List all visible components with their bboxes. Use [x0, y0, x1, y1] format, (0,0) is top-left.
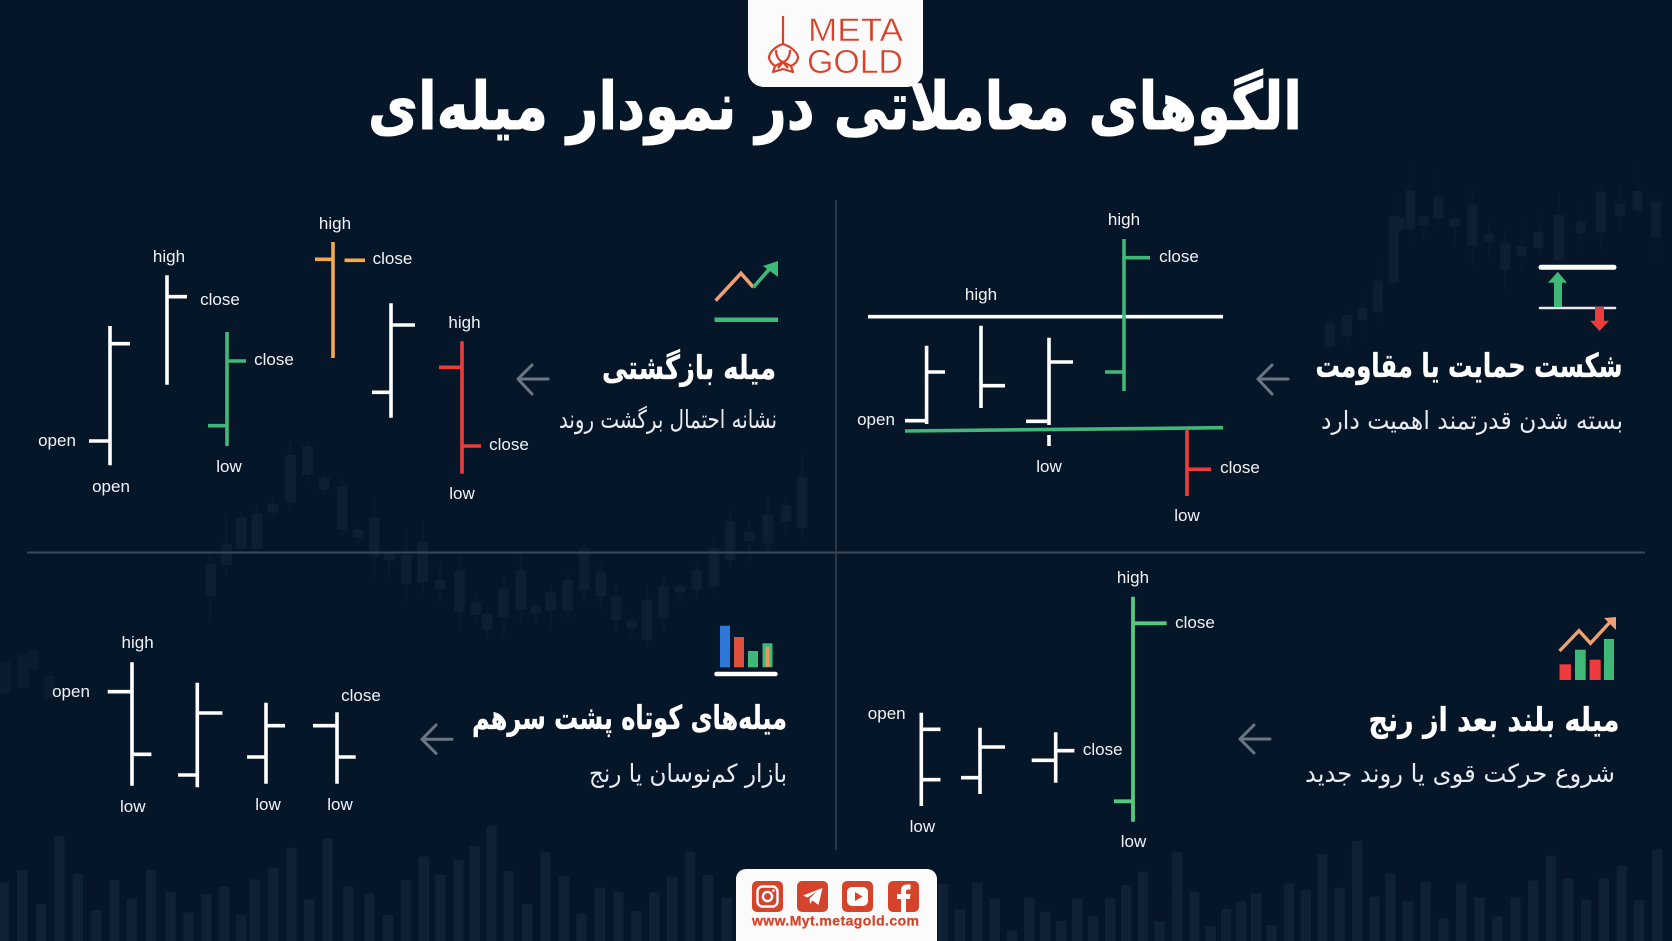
chart: bars: [52, 633, 381, 816]
heading: میله بازگشتی: [602, 348, 776, 387]
chart: bars: close: [254, 350, 294, 369]
logo card: [748, 0, 923, 87]
chart: bars: high: [965, 285, 997, 304]
heading: میله‌های کوتاه پشت سرهم: [472, 698, 787, 738]
icon: trend reversal: [714, 261, 778, 320]
icon: telegram: [797, 881, 828, 912]
chart: bars: close: [489, 435, 529, 454]
chart: bars: high: [448, 313, 481, 332]
chart: bars: close: [1159, 247, 1199, 266]
chart: bars: low: [449, 484, 475, 503]
chart: bars: [868, 568, 1215, 851]
chart: bars: close: [1083, 740, 1123, 759]
chart: bars: [857, 210, 1260, 525]
chart: bars: low: [120, 797, 146, 816]
chart: bars: high: [153, 247, 185, 266]
panel: short consecutive candles: [52, 626, 787, 816]
chart: bars: low: [255, 795, 281, 814]
icon: youtube: [842, 881, 873, 912]
arrow: [1240, 725, 1270, 753]
heading: میله بلند بعد از رنج: [1368, 700, 1620, 740]
icon: facebook: [888, 881, 919, 912]
panel: long candle after range: [868, 568, 1620, 851]
icon: instagram: [752, 881, 783, 912]
chart: bars: open: [857, 410, 895, 429]
chart: bars: low: [327, 795, 353, 814]
arrow: [422, 725, 452, 753]
chart: bars: high: [1108, 210, 1140, 229]
chart: bars: open: [92, 477, 130, 496]
title: الگوهای معاملاتی در نمودار میله‌ای: [368, 68, 1302, 146]
logo text: META: [808, 12, 904, 48]
chart: bars: close: [1175, 613, 1215, 632]
chart: bars: low: [1121, 832, 1147, 851]
chart: bars: high: [1117, 568, 1149, 587]
chart: bars: open: [38, 431, 76, 450]
description: شروع حرکت قوی یا روند جدید: [1305, 759, 1615, 789]
panel: reversal candle: [38, 214, 778, 503]
footer card: [736, 869, 937, 941]
icon: breakout arrows: [1540, 267, 1615, 331]
arrow: [518, 365, 548, 394]
logo text: GOLD: [807, 43, 903, 80]
icon: tulip logo: [769, 16, 798, 72]
icon: small bars: [716, 626, 776, 674]
chart: bars: open: [52, 682, 90, 701]
description: نشانه احتمال برگشت روند: [559, 405, 777, 435]
chart: bars: close: [373, 249, 412, 268]
chart: bars: [38, 214, 529, 503]
chart: bars: open: [868, 704, 906, 723]
chart: bars: low: [1036, 457, 1062, 476]
description: بازار کم‌نوسان یا رنج: [589, 759, 787, 789]
chart: bars: low: [216, 457, 242, 476]
panel: support or resistance break: [857, 210, 1623, 525]
chart: bars: close: [341, 686, 381, 705]
website: www.Myt.metagold.com: [751, 912, 919, 928]
logo text: [807, 12, 904, 80]
chart: bars: low: [910, 817, 936, 836]
description: بسته شدن قدرتمند اهمیت دارد: [1321, 406, 1623, 435]
chart: bars: close: [1220, 458, 1260, 477]
chart: bars: high: [319, 214, 351, 233]
arrow: [1258, 365, 1288, 394]
chart: bars: low: [1174, 506, 1200, 525]
chart: bars: high: [122, 633, 154, 652]
icon: bars and trend: [1560, 617, 1616, 680]
chart: bars: close: [200, 290, 240, 309]
